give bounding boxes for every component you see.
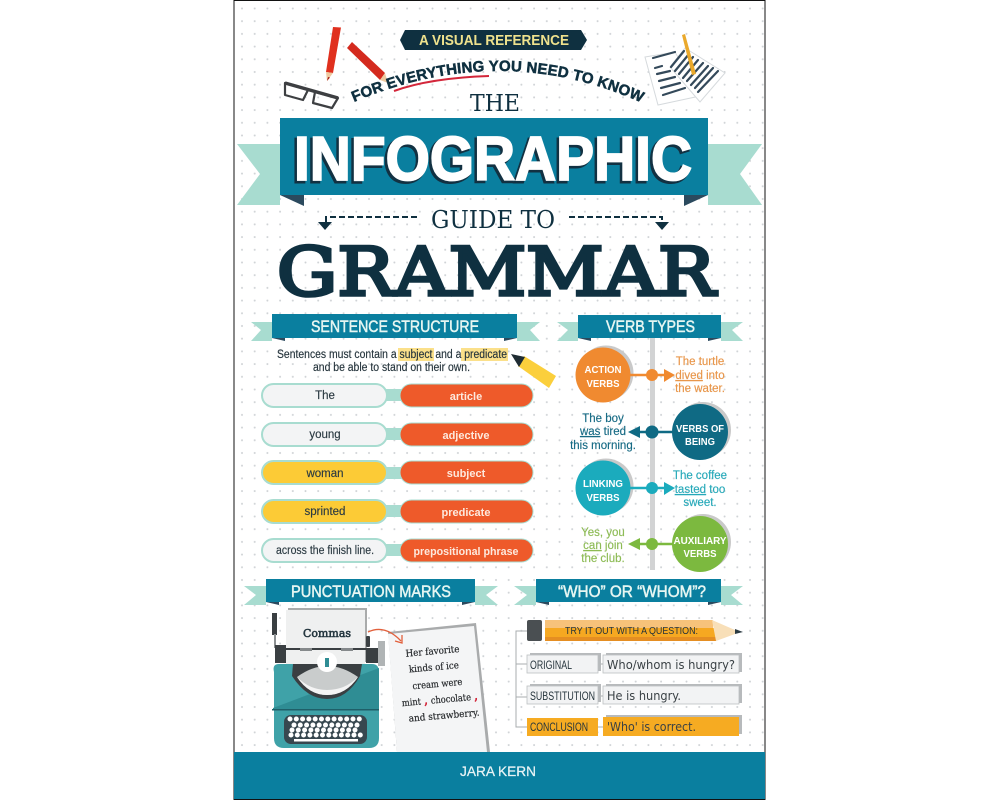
verb: linking: tasted too — [675, 484, 725, 496]
verb: auxiliary: VERBS — [684, 549, 717, 560]
heading: verb types — [557, 315, 743, 341]
verb: being: The boy — [582, 413, 624, 425]
dashed arrow right — [569, 217, 669, 230]
title banner: infographic: INFOGRAPHIC — [294, 125, 692, 194]
verb: linking: sweet. — [683, 497, 717, 509]
badge: a visual reference — [400, 30, 587, 50]
verb: linking — [576, 458, 727, 516]
row: sprinted / predicate: sprinted — [305, 506, 345, 518]
row: woman / subject: subject — [447, 468, 486, 480]
panel: punctuation marks — [244, 579, 498, 752]
icon: red pencils — [326, 27, 388, 83]
row: sprinted / predicate: predicate — [442, 507, 490, 519]
panel: sentence structure — [251, 314, 556, 562]
verb: being: was tired — [579, 426, 626, 438]
verb: linking: The coffee — [673, 470, 727, 482]
icon: papers and pencil — [645, 34, 725, 105]
note text: mint , chocolate , — [401, 689, 478, 709]
verb: auxiliary: can join — [583, 540, 623, 552]
title banner: infographic — [237, 118, 762, 206]
verb: action: VERBS — [586, 379, 620, 390]
row: the / article: article — [450, 391, 482, 403]
note text — [397, 643, 480, 725]
intro text: Sentences must contain a subject and a predicate — [277, 349, 507, 361]
row: conclusion — [527, 715, 742, 736]
row: original — [527, 653, 742, 673]
row: young / adjective — [262, 423, 533, 446]
icon: red arrow — [368, 629, 402, 643]
guide to: GUIDE TO — [431, 206, 555, 234]
icon: typewriter — [272, 608, 385, 748]
verb: action: the water. — [675, 383, 725, 395]
badge: a visual reference: A VISUAL REFERENCE — [419, 33, 569, 49]
row: substitution: SUBSTITUTION — [530, 691, 595, 703]
row: young / adjective: adjective — [442, 430, 490, 442]
row: the / article: The — [315, 390, 335, 402]
heading: sentence structure — [251, 314, 540, 341]
row: conclusion: 'Who' is correct. — [607, 720, 696, 734]
verb: being: this morning. — [570, 440, 636, 452]
verb: auxiliary — [581, 514, 731, 572]
verb: auxiliary: AUXILIARY — [674, 536, 727, 547]
heading: punctuation marks — [244, 579, 498, 605]
footer band — [234, 752, 765, 799]
verb: linking: LINKING — [583, 479, 623, 490]
highlights — [398, 348, 508, 361]
verb: action: ACTION — [584, 365, 622, 376]
row: young / adjective: young — [309, 429, 341, 441]
row: substitution — [527, 684, 742, 704]
verb: action: The turtle — [676, 356, 724, 368]
icon: highlighter — [511, 354, 556, 388]
verb: action — [576, 346, 725, 402]
row: across the finish line / prepositional phrase: prepositional phrase — [414, 546, 518, 558]
paper note — [388, 623, 490, 752]
intro text: and be able to stand on their own. — [313, 362, 470, 374]
row: across the finish line / prepositional phrase — [262, 539, 533, 562]
icon: pencil — [527, 620, 743, 641]
heading: who or whom: “WHO” OR “WHOM”? — [558, 583, 706, 601]
note text: and strawberry. — [408, 708, 480, 725]
heading: who or whom — [514, 579, 743, 605]
note text: Her favorite — [405, 644, 460, 660]
verb: linking: VERBS — [586, 493, 620, 504]
row: the / article — [262, 384, 533, 407]
timeline spine — [650, 338, 655, 570]
note text: cream were — [412, 677, 463, 692]
verb: being — [570, 402, 731, 460]
row: original: ORIGINAL — [530, 660, 572, 672]
row: woman / subject: woman — [305, 468, 344, 480]
verb: auxiliary: the club. — [581, 553, 625, 565]
row: across the finish line / prepositional phrase: across the finish line. — [276, 545, 374, 557]
verb: being: VERBS OF — [676, 424, 724, 435]
heading: verb types: VERB TYPES — [606, 318, 695, 336]
book cover — [234, 0, 765, 800]
heading: punctuation marks: PUNCTUATION MARKS — [291, 583, 451, 601]
row: conclusion: CONCLUSION — [530, 722, 588, 734]
verb: action: dived into — [675, 370, 725, 382]
bracket connector — [516, 631, 604, 727]
commas label: Commas — [303, 626, 351, 640]
row: sprinted / predicate — [262, 500, 533, 523]
intro text — [277, 349, 507, 374]
title banner: infographic: INFOGRAPHIC — [292, 127, 690, 196]
verb: auxiliary: Yes, you — [581, 527, 625, 539]
verb: being: BEING — [685, 437, 715, 448]
dashed arrow left — [318, 217, 417, 230]
note text: kinds of ice — [409, 660, 460, 675]
author: JARA KERN — [460, 763, 536, 779]
row: woman / subject — [262, 461, 533, 484]
heading: sentence structure: SENTENCE STRUCTURE — [311, 318, 479, 336]
the: THE — [470, 91, 520, 117]
panel: verb types — [557, 315, 743, 572]
icon: pencil: TRY IT OUT WITH A QUESTION: — [565, 625, 698, 637]
row: original: Who/whom is hungry? — [607, 658, 735, 672]
icon: glasses — [285, 83, 338, 108]
grammar: GRAMMAR — [277, 234, 718, 311]
row: substitution: He is hungry. — [607, 689, 681, 703]
curved subtitle: FOR EVERYTHING YOU NEED TO KNOW — [350, 60, 646, 102]
panel: who or whom — [514, 579, 743, 736]
